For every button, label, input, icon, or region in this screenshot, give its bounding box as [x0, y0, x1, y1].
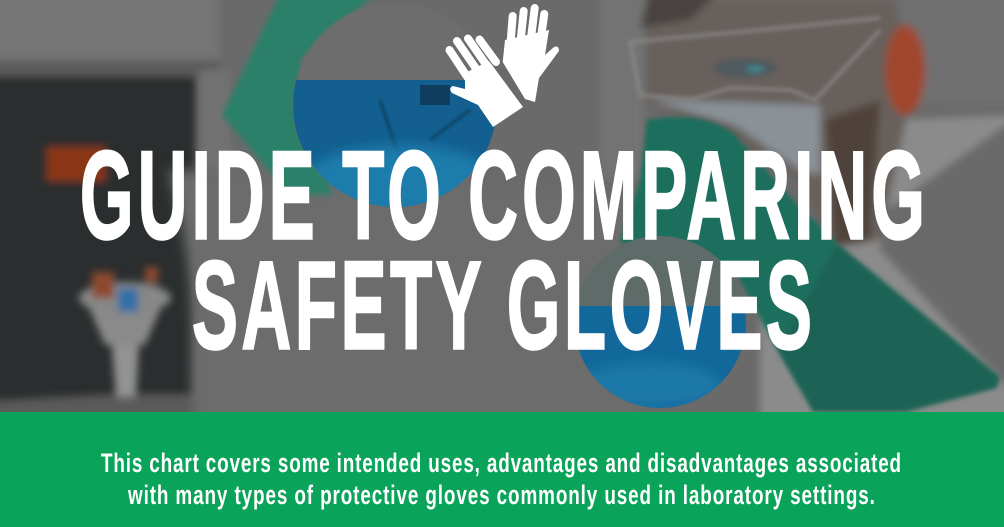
- title line 1: GUIDE TO COMPARING: [80, 127, 925, 266]
- icon: left glove: [450, 38, 523, 127]
- description line 1: This chart covers some intended uses, advantages and disadvantages associated: [101, 448, 901, 478]
- scientist face, neck and ear: [600, 0, 1004, 420]
- title: [80, 127, 925, 376]
- title line 2: SAFETY GLOVES: [192, 237, 812, 376]
- description line 2: with many types of protective gloves commonly used in laboratory settings.: [127, 480, 875, 510]
- icon: right glove: [503, 8, 559, 102]
- left green glove: [222, 0, 380, 195]
- lab background: shelves and dark cabinet: [0, 0, 230, 420]
- background photo: scientist in lab: [0, 0, 1004, 420]
- icon: pair of gloves: [450, 8, 559, 127]
- blurred lab apparatus: [79, 267, 171, 398]
- lab coat torso: [164, 163, 202, 412]
- lower flask with blue liquid: [578, 236, 746, 408]
- safety goggles: [630, 18, 880, 100]
- scientist eye: [713, 59, 777, 77]
- upper flask with blue liquid: [292, 8, 495, 207]
- green description band: [0, 412, 1004, 527]
- right green glove and cuff: [620, 117, 1000, 412]
